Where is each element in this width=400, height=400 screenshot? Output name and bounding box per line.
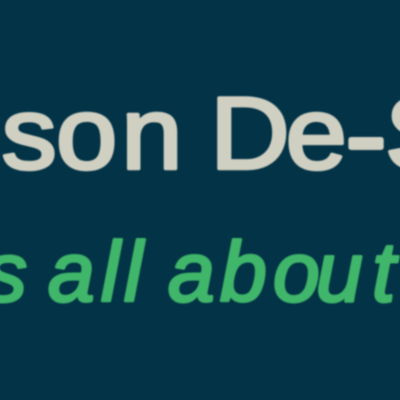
- tagline: all: [48, 225, 145, 319]
- tagline: about: [168, 225, 399, 319]
- title: [2, 77, 400, 192]
- title: -: [346, 78, 386, 192]
- title: son: [2, 77, 183, 191]
- tagline: [0, 225, 399, 319]
- title: De: [210, 77, 347, 191]
